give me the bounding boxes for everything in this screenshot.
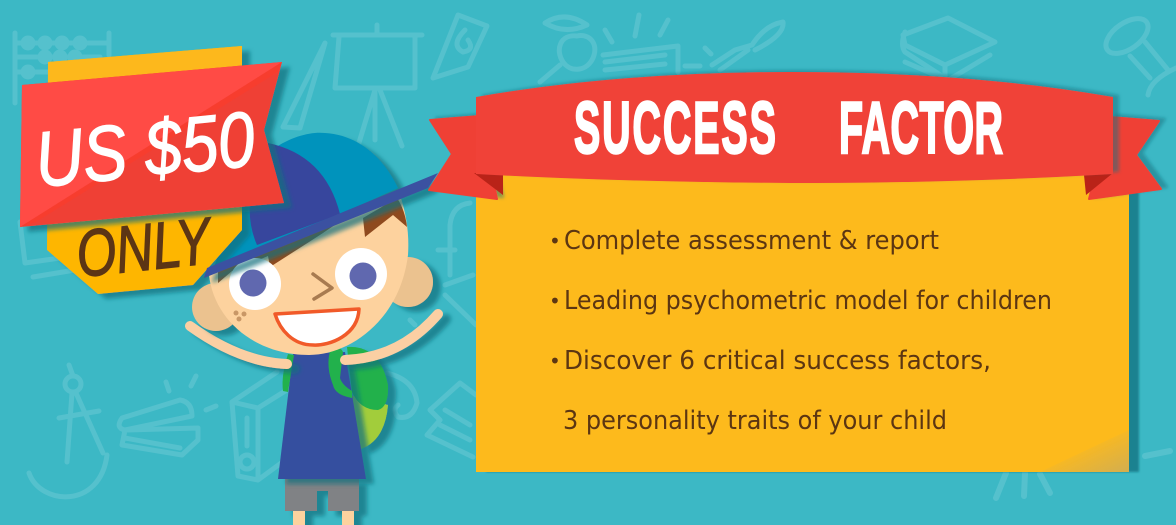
bullet list: • <box>549 289 561 313</box>
ribbon banner <box>429 72 1161 199</box>
bullet list <box>549 226 1052 436</box>
freckles <box>234 310 246 322</box>
arms <box>190 314 438 364</box>
title: SUCCESS <box>574 88 778 169</box>
bullet list: • <box>549 229 561 253</box>
bullet list: Discover 6 critical success factors, <box>564 346 991 376</box>
panel: yellow success factor card <box>476 165 1129 472</box>
bullet list: • <box>549 349 561 373</box>
bullet list: Complete assessment & report <box>564 226 939 256</box>
shorts and legs <box>285 479 359 525</box>
price flag <box>20 62 284 227</box>
price text: US $50 <box>31 95 259 204</box>
eyes <box>229 248 387 310</box>
ears <box>192 257 433 331</box>
shirt <box>278 352 366 479</box>
bullet list: 3 personality traits of your child <box>563 406 947 436</box>
ribbon main band <box>476 72 1113 183</box>
title <box>574 88 1004 169</box>
mouth <box>275 309 359 345</box>
title: FACTOR <box>839 88 1004 169</box>
ribbon folds <box>474 173 1113 195</box>
hair <box>218 198 407 283</box>
boy character <box>190 143 438 525</box>
hat dome back <box>212 133 398 272</box>
bullet list: Leading psychometric model for children <box>564 286 1052 316</box>
ribbon tails <box>429 116 1161 199</box>
head <box>209 195 408 355</box>
nose <box>313 274 332 299</box>
hat dark panel <box>250 143 340 245</box>
price tag: yellow ONLY pennant <box>47 46 242 294</box>
backpack <box>347 347 388 449</box>
ONLY label: ONLY <box>73 203 217 291</box>
hat brim <box>204 173 438 278</box>
backpack straps <box>283 347 352 398</box>
